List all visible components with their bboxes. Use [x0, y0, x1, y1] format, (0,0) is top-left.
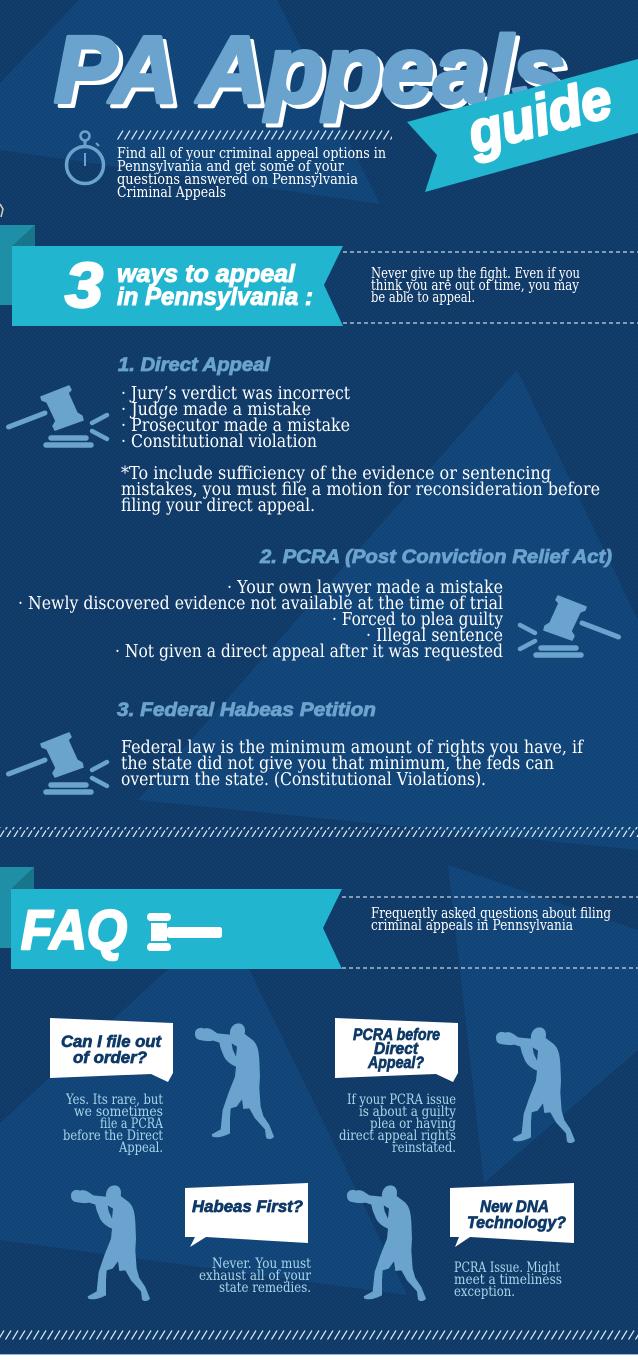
answer: new DNA: PCRA Issue. Might [454, 1260, 560, 1276]
hatch divider bottom [0, 1330, 638, 1340]
intro text: Criminal Appeals [117, 183, 226, 201]
list: direct appeal [121, 384, 350, 452]
answer: habeas first [199, 1256, 311, 1296]
title: PA Appeals [58, 21, 569, 127]
intro text [117, 144, 386, 201]
dashed rules: FAQ [342, 897, 638, 968]
banner side text: be able to appeal. [371, 290, 475, 306]
answer: PCRA before: direct appeal rights [339, 1128, 456, 1144]
answer: new DNA: exception. [454, 1284, 515, 1300]
intro text: questions answered on Pennsylvania [117, 170, 358, 188]
FAQ side text [371, 906, 611, 934]
list: PCRA: · Illegal sentence [366, 626, 503, 646]
speech bubble: new DNA: New DNA [480, 1198, 549, 1216]
icon: stopwatch [66, 132, 104, 184]
list: direct appeal: · Judge made a mistake [121, 400, 311, 420]
answer: can I file: Yes. Its rare, but [65, 1092, 163, 1108]
icon: white gavel [147, 913, 222, 951]
banner: 3 ways to appeal: ways to appeal [117, 260, 296, 288]
speech bubble: new DNA: Technology? [467, 1214, 566, 1232]
speech bubble: PCRA before: Appeal? [367, 1054, 424, 1072]
icon: gavel 1 [8, 386, 107, 445]
note: reconsideration: mistakes, you must file a motion for reconsideration before [121, 480, 600, 500]
edge fragment [0, 204, 3, 217]
answer: habeas first: state remedies. [219, 1280, 311, 1296]
answer: can I file: file a PCRA [100, 1116, 164, 1132]
heading: federal habeas: 3. Federal Habeas Petition [117, 699, 376, 721]
banner side text: Never give up the fight. Even if you [371, 266, 580, 282]
list: PCRA: · Your own lawyer made a mistake [227, 578, 503, 598]
speech bubble: new DNA [450, 1183, 574, 1247]
answer: can I file: Appeal. [118, 1140, 163, 1156]
answer: can I file [63, 1092, 164, 1156]
answer: can I file: before the Direct [63, 1128, 163, 1144]
hatch strip: intro [117, 130, 392, 140]
banner: 3 ways to appeal [0, 225, 343, 326]
intro text: Pennsylvania and get some of your [117, 157, 345, 175]
note: reconsideration [121, 464, 600, 516]
list: direct appeal: · Prosecutor made a mistake [121, 416, 350, 436]
list: PCRA: · Forced to plea guilty [332, 610, 503, 630]
intro text: Find all of your criminal appeal options in [117, 144, 386, 162]
speech bubble: habeas first: Habeas First? [192, 1198, 303, 1216]
answer: habeas first: Never. You must [212, 1256, 311, 1272]
answer: habeas first: exhaust all of your [199, 1268, 311, 1284]
bottom edge [0, 1354, 638, 1360]
answer: new DNA [454, 1260, 562, 1300]
answer: can I file: we sometimes [74, 1104, 163, 1120]
background triangle: top [0, 0, 380, 204]
list: direct appeal: · Jury’s verdict was incorrect [121, 384, 350, 404]
background triangle: middle [138, 370, 638, 850]
icon: gavel 2 [520, 596, 618, 655]
speech bubble: can I file [50, 1018, 173, 1082]
text: federal habeas: Federal law is the minimum amount of rights you have, if [121, 738, 584, 758]
speech bubble: PCRA before: Direct [374, 1040, 419, 1058]
speech bubble: PCRA before [335, 1018, 458, 1082]
list: PCRA [18, 578, 503, 662]
speech bubble: habeas first [185, 1183, 308, 1247]
text: federal habeas: overturn the state. (Constitutional Violations). [121, 770, 486, 790]
answer: PCRA before: If your PCRA issue [347, 1092, 456, 1108]
banner side text [371, 266, 580, 306]
note: reconsideration: filing your direct appeal. [121, 496, 315, 516]
speech bubble: can I file: of order? [73, 1049, 147, 1067]
banner: 3 ways to appeal: 3 [65, 251, 103, 321]
list: PCRA: · Not given a direct appeal after it was requested [115, 642, 503, 662]
heading: direct appeal: 1. Direct Appeal [118, 354, 271, 376]
speech bubble: can I file: Can I file out [61, 1033, 163, 1051]
text: federal habeas: the state did not give you that minimum, the feds can [121, 754, 554, 774]
guide ribbon: guide [460, 66, 618, 166]
boxer 4 [347, 1185, 426, 1301]
background triangle: FAQ left [0, 940, 407, 1295]
guide ribbon [407, 59, 638, 192]
banner: FAQ [0, 867, 342, 969]
boxer 2 [496, 1027, 575, 1143]
FAQ side text: criminal appeals in Pennsylvania [371, 918, 573, 934]
note: reconsideration: *To include sufficiency of the evidence or sentencing [121, 464, 551, 484]
icon: gavel 3 [8, 733, 107, 792]
speech bubble: PCRA before: PCRA before [353, 1026, 440, 1044]
boxer 1 [195, 1023, 274, 1139]
answer: PCRA before: is about a guilty [359, 1104, 456, 1120]
text: federal habeas [121, 738, 584, 790]
list: PCRA: · Newly discovered evidence not available at the time of trial [18, 594, 503, 614]
answer: PCRA before: plea or having [370, 1116, 456, 1132]
banner side text: think you are out of time, you may [371, 278, 580, 294]
answer: new DNA: meet a timeliness [454, 1272, 562, 1288]
banner: FAQ: FAQ [21, 898, 127, 961]
heading: PCRA: 2. PCRA (Post Conviction Relief Act) [259, 546, 612, 568]
hatch divider [0, 827, 638, 837]
banner: 3 ways to appeal: in Pennsylvania : [117, 283, 313, 311]
boxer 3 [71, 1185, 150, 1301]
answer: PCRA before: reinstated. [392, 1140, 456, 1156]
dashed rules: ways [343, 252, 638, 323]
title: PA Appeals [54, 17, 565, 123]
list: direct appeal: · Constitutional violation [121, 432, 317, 452]
answer: PCRA before [339, 1092, 456, 1156]
background triangle: FAQ right [448, 865, 638, 1183]
